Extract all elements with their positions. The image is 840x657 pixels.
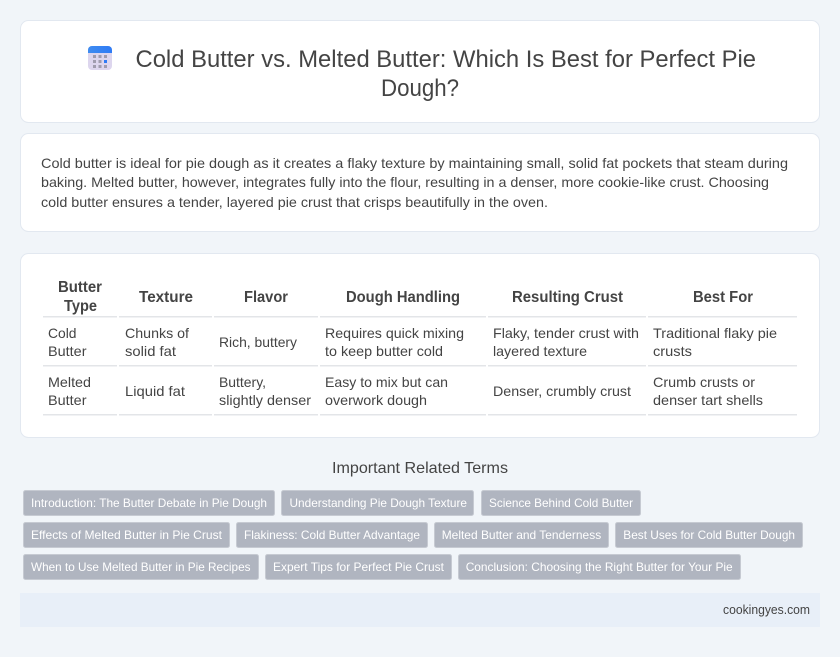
tag row 2: Effects of Melted Butter in Pie Crust <box>31 528 223 542</box>
table header row <box>58 279 753 315</box>
table row: melted butter: overwork dough <box>325 392 427 408</box>
table row: cold butter: to keep butter cold <box>325 343 443 359</box>
title: Cold Butter vs. Melted Butter: Which Is Best for Perfect Pie <box>136 46 756 73</box>
tag row 2: Flakiness: Cold Butter Advantage <box>244 528 420 542</box>
footer <box>20 593 820 627</box>
table row: melted butter <box>48 374 763 408</box>
panel: introduction text: cold butter ensures a tender, layered pie crust that crisps beautifully in the oven. <box>41 194 548 210</box>
tag row 1: Understanding Pie Dough Texture <box>290 496 467 510</box>
table row rules <box>43 316 797 416</box>
table row: cold butter: Rich, buttery <box>219 334 297 350</box>
table row: melted butter: Crumb crusts or <box>653 374 755 390</box>
table row: cold butter: Flaky, tender crust with <box>493 325 639 341</box>
panel: introduction text <box>20 134 820 232</box>
tag row 2: Best Uses for Cold Butter Dough <box>623 528 795 542</box>
table row: melted butter: Melted <box>48 374 91 390</box>
table header row: Butter <box>58 279 102 296</box>
tag row 2 <box>24 522 802 548</box>
tag row 3 <box>24 554 740 580</box>
tag row 3: Conclusion: Choosing the Right Butter for Your Pie <box>466 560 733 574</box>
table row: melted butter: Buttery, <box>219 374 266 390</box>
table header row: Type <box>64 298 97 315</box>
table row: cold butter: Traditional flaky pie <box>653 325 777 341</box>
table row: cold butter: Chunks of <box>125 325 189 341</box>
table row: cold butter: Cold <box>48 325 76 341</box>
tag row 1 <box>24 490 640 516</box>
table row: cold butter: crusts <box>653 343 692 359</box>
panel: comparison table <box>20 254 820 438</box>
table header row: Flavor <box>244 289 288 306</box>
tag row 3: When to Use Melted Butter in Pie Recipes <box>31 560 250 574</box>
table row: cold butter <box>48 325 777 359</box>
icon: calendar <box>88 46 112 70</box>
tag row 1: Introduction: The Butter Debate in Pie Dough <box>31 496 267 510</box>
heading: important related terms: Important Related Terms <box>332 460 508 477</box>
table row: cold butter: solid fat <box>125 343 176 359</box>
panel: introduction text: Cold butter is ideal for pie dough as it creates a flaky texture by maintaining small, solid fat pockets that steam during <box>41 155 788 171</box>
tag row 3: Expert Tips for Perfect Pie Crust <box>273 560 445 574</box>
table row: melted butter: denser tart shells <box>653 392 763 408</box>
table row: melted butter: slightly denser <box>219 392 311 408</box>
tag row 1: Science Behind Cold Butter <box>489 496 633 510</box>
table header row: Texture <box>139 289 193 306</box>
panel: title header <box>20 20 820 122</box>
table row: melted butter: Denser, crumbly crust <box>493 383 631 399</box>
table row: melted butter: Easy to mix but can <box>325 374 448 390</box>
panel: related term tags <box>24 490 802 580</box>
title: Dough? <box>381 75 459 102</box>
tag row 2: Melted Butter and Tenderness <box>442 528 601 542</box>
table row: cold butter: Butter <box>48 343 87 359</box>
table row: cold butter: layered texture <box>493 343 587 359</box>
table header row: Dough Handling <box>346 289 460 306</box>
table header row: Best For <box>693 289 753 306</box>
title <box>136 46 756 102</box>
table row: melted butter: Liquid fat <box>125 383 185 399</box>
footer: cookingyes.com <box>723 603 810 617</box>
table row: melted butter: Butter <box>48 392 87 408</box>
panel: introduction text: baking. Melted butter, however, integrates fully into the flour, resulting in a denser, more cookie-like crust. Choosing <box>41 174 769 190</box>
table header row: Resulting Crust <box>512 289 623 306</box>
table row: cold butter: Requires quick mixing <box>325 325 464 341</box>
